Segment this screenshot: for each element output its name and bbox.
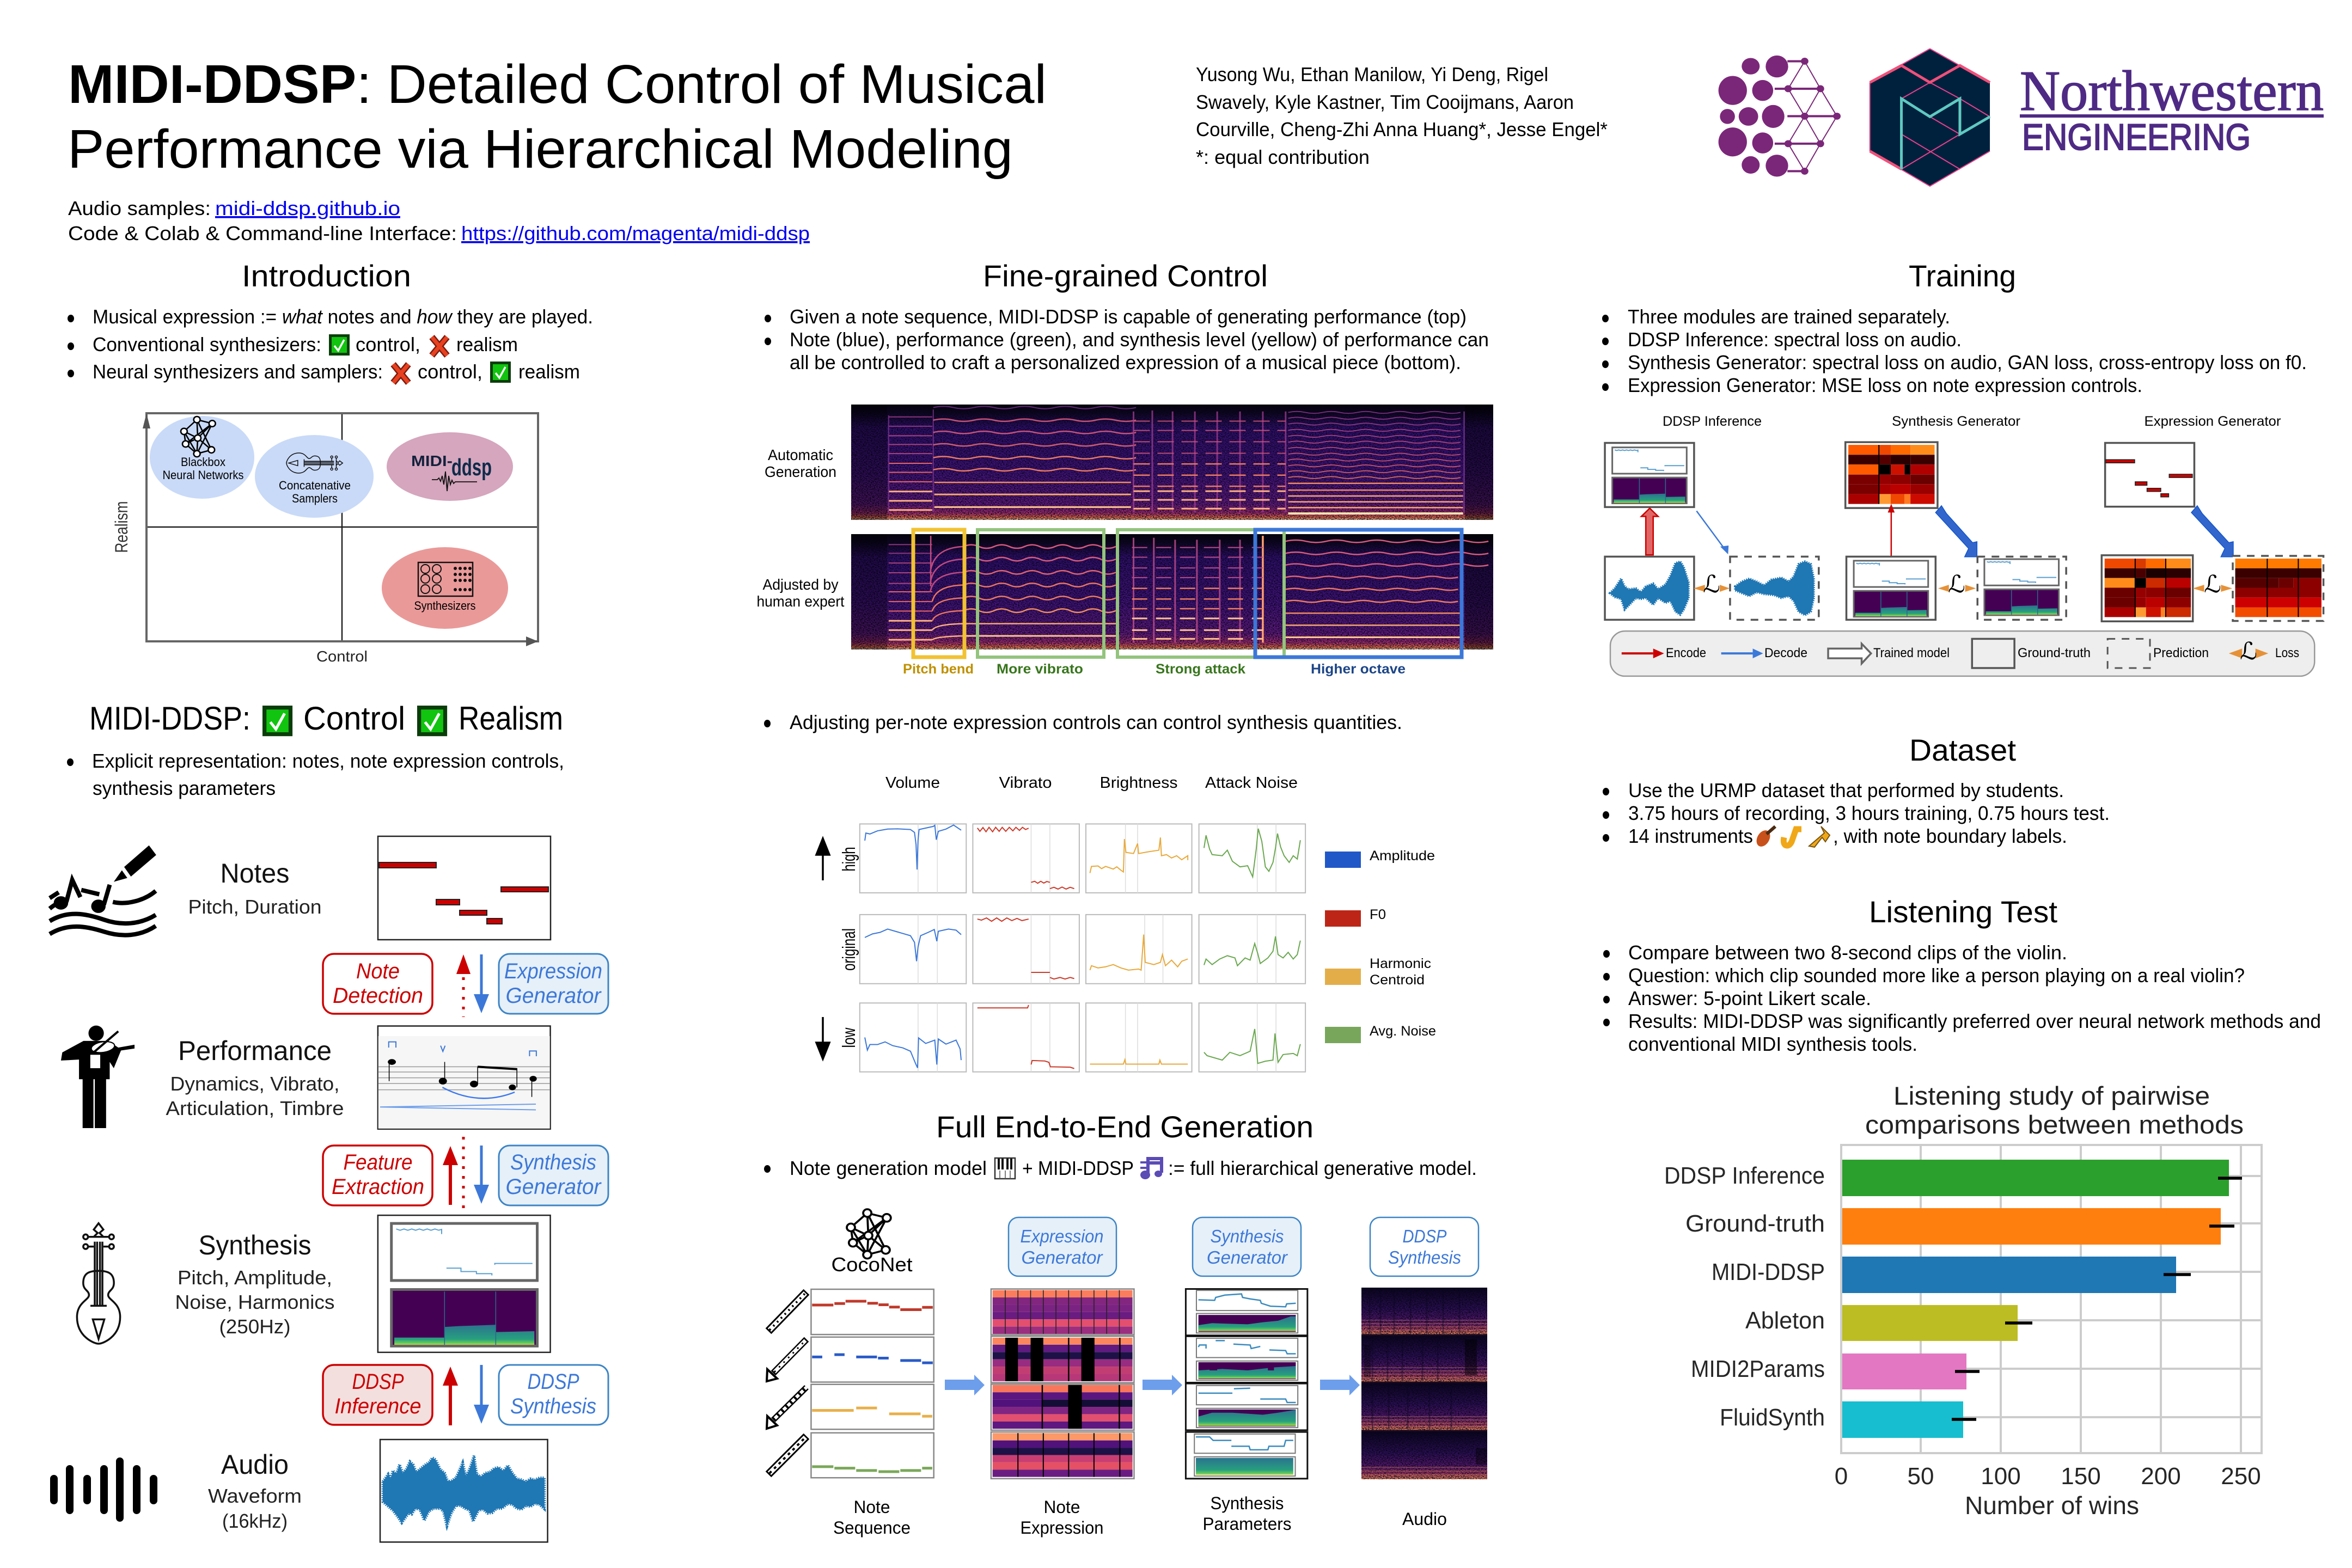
box: expression generator: Generator [505, 984, 602, 1008]
chart column labels: Brightness [1100, 774, 1177, 792]
intro bullets: control, [418, 360, 482, 383]
row labels: high [839, 847, 859, 871]
chart column labels [885, 774, 1298, 792]
x axis ticks: 100 [1981, 1463, 2021, 1490]
chart column labels: Vibrato [999, 774, 1052, 792]
label: synthesis: Synthesis [198, 1230, 311, 1260]
authors: Yusong Wu, Ethan Manilow, Yi Deng, Rigel [1196, 63, 1548, 85]
box: DDSP synthesis: Synthesis [510, 1394, 596, 1418]
title: MIDI-DDSP: Detailed Control of Musical [68, 54, 1047, 115]
row labels: low [839, 1027, 859, 1048]
training column labels: DDSP Inference [1663, 414, 1762, 429]
logo: hexagon M [1870, 49, 1990, 186]
logo: Northwestern Engineering [2020, 59, 2324, 158]
box: synthesis generator: Synthesis [1210, 1226, 1284, 1246]
x axis ticks: 0 [1835, 1463, 1848, 1490]
listening bullets: Compare between two 8-second clips of the violin. [1628, 941, 2067, 964]
column labels: Note [1043, 1497, 1080, 1517]
x axis ticks: 150 [2061, 1463, 2101, 1490]
column labels: Audio [1402, 1509, 1447, 1529]
panel: fine-grained control [757, 259, 1493, 1072]
bubble: blackbox neural networks: Blackbox [181, 455, 225, 469]
box: DDSP synthesis [1370, 1217, 1479, 1276]
box: DDSP inference [323, 1365, 432, 1425]
highlight box: higher octave [1255, 530, 1462, 657]
column labels: Parameters [1202, 1514, 1292, 1534]
box: feature extraction [323, 1146, 432, 1205]
method labels: MIDI-DDSP [1712, 1259, 1825, 1285]
links block [68, 197, 810, 244]
heading: full end-to-end generation: Full End-to-End Generation [936, 1110, 1314, 1144]
bubble: concatenative samplers: Samplers [292, 492, 338, 505]
box: expression generator [1009, 1217, 1116, 1276]
highlight labels: Strong attack [1156, 661, 1245, 677]
links block: midi-ddsp.github.io [215, 197, 400, 219]
icon: notes on staff with pen [50, 846, 156, 935]
loss symbol: synthesis generator: ℒ [1948, 571, 1965, 598]
x axis ticks: 200 [2141, 1463, 2181, 1490]
panel: listening test [1603, 895, 2321, 1520]
heading: MIDI-DDSP control realism: Control [303, 700, 405, 737]
listening bullets: conventional MIDI synthesis tools. [1628, 1033, 1917, 1055]
x axis ticks [1835, 1463, 2261, 1490]
panel: dataset [1603, 733, 2110, 849]
box: DDSP inference: DDSP [352, 1370, 404, 1394]
method labels: FluidSynth [1720, 1404, 1825, 1431]
method labels [1664, 1162, 1825, 1431]
title [68, 54, 1047, 180]
icon: trumpet emoji [1809, 826, 1830, 847]
highlight box: strong attack [1117, 530, 1284, 657]
axis label: control: Control [316, 648, 368, 665]
synthesis parameter panels [1186, 1289, 1308, 1479]
bullet: note generation model: := full hierarchical generative model. [1168, 1157, 1477, 1179]
training column labels: Expression Generator [2145, 414, 2281, 429]
label: synthesis: Noise, Harmonics [175, 1291, 334, 1313]
fine-grained bullets: all be controlled to craft a personalized expression of a musical piece (bottom). [790, 351, 1461, 373]
intro bullets: realism [456, 333, 518, 356]
training legend: Trained model [1873, 646, 1950, 660]
intro bullets: Neural synthesizers and samplers: [93, 360, 383, 383]
line series: vibrato [978, 828, 1074, 1069]
dataset bullets [1603, 779, 2110, 849]
row labels [839, 847, 859, 1048]
dataset bullets: Use the URMP dataset that performed by students. [1628, 779, 2064, 801]
highlight labels: More vibrato [997, 661, 1083, 677]
waveform [380, 1440, 548, 1542]
bars [1842, 1160, 2229, 1438]
method labels: Ableton [1745, 1307, 1825, 1334]
highlight labels: Higher octave [1311, 661, 1406, 677]
arrow: DDSP inference up [443, 1367, 458, 1425]
highlight box: pitch bend [913, 530, 964, 657]
dataset bullets: 14 instruments [1628, 825, 1753, 847]
highlight labels [903, 661, 1406, 677]
line series: attack noise [1204, 829, 1300, 1063]
heading: introduction: Introduction [242, 259, 411, 293]
box: note detection: Note [356, 959, 400, 983]
label: notes [188, 858, 321, 918]
arrow: feature extraction up [443, 1137, 463, 1214]
icon: audio bars [54, 1461, 154, 1518]
panel: full end-to-end generation [764, 1110, 1487, 1538]
training legend [1610, 631, 2314, 676]
authors [1196, 63, 1608, 168]
column labels [833, 1493, 1447, 1538]
heading: training: Training [1909, 259, 2016, 293]
heading: MIDI-DDSP control realism: Realism [459, 700, 563, 737]
diagram: expression generator training [2101, 443, 2324, 621]
chart legend: F0 [1370, 907, 1386, 922]
intro bullets [68, 305, 593, 383]
axis label: realism: Realism [112, 501, 131, 553]
icon: CocoNet network [831, 1209, 913, 1276]
box: DDSP inference: Inference [334, 1394, 421, 1418]
dataset bullets: 3.75 hours of recording, 3 hours training, 0.75 hours test. [1628, 802, 2110, 824]
arrow: note detection up [456, 954, 471, 1017]
fine-grained bullets: Given a note sequence, MIDI-DDSP is capable of generating performance (top) [790, 305, 1467, 328]
arrow: synthesis generator down [474, 1146, 489, 1204]
arrow: to expression [945, 1375, 985, 1395]
label: performance: Performance [178, 1036, 332, 1066]
chart legend: Centroid [1370, 972, 1425, 988]
label: automatic generation: Automatic [768, 446, 833, 463]
bubble: MIDI-DDSP logo: ddsp [451, 454, 492, 481]
box: DDSP synthesis [499, 1365, 608, 1425]
authors: Swavely, Kyle Kastner, Tim Cooijmans, Aaron [1196, 91, 1574, 113]
bullet: adjusting per-note: Adjusting per-note expression controls can control synthesis quantities. [790, 711, 1402, 733]
training bullets [1602, 305, 2307, 396]
training legend: Prediction [2153, 646, 2209, 660]
logo: Northwestern Engineering: Northwestern [2020, 59, 2324, 122]
bubble: concatenative samplers [255, 435, 374, 518]
chart title: comparisons between methods [1865, 1110, 2244, 1139]
icon: saxophone emoji [1783, 829, 1801, 846]
heading: dataset: Dataset [1909, 733, 2016, 767]
box: note detection: Detection [333, 984, 423, 1008]
icon: music notes [1140, 1159, 1162, 1179]
spectrogram: adjusted [851, 534, 1493, 650]
label: audio: Waveform [208, 1485, 302, 1507]
panel: introduction [68, 259, 593, 665]
audio spectrograms [1361, 1288, 1487, 1479]
box: expression generator: Expression [504, 959, 602, 983]
training bullets: DDSP Inference: spectral loss on audio. [1628, 328, 1962, 351]
chart title: Listening study of pairwise [1893, 1081, 2210, 1110]
arrow: to synthesis parameters [1143, 1375, 1182, 1395]
quadrant chart [112, 413, 538, 665]
piano roll [378, 836, 551, 940]
training bullets: Synthesis Generator: spectral loss on audio, GAN loss, cross-entropy loss on f0. [1628, 351, 2307, 373]
label: notes: Pitch, Duration [188, 896, 321, 918]
dataset bullets: , with note boundary labels. [1833, 825, 2067, 847]
diagram: synthesis generator training [1846, 442, 2066, 620]
label: adjusted by human expert [757, 576, 845, 610]
chart title [1865, 1081, 2244, 1139]
label: audio [208, 1449, 302, 1532]
fine-grained bullets: Note (blue), performance (green), and synthesis level (yellow) of performance can [790, 328, 1489, 351]
label: synthesis: Pitch, Amplitude, [178, 1266, 332, 1289]
training legend: ℒ [2240, 638, 2257, 665]
row labels: original [839, 928, 859, 971]
bullet: explicit representation: Explicit representation: notes, note expression controls, [92, 750, 564, 772]
box: expression generator: Generator [1022, 1247, 1104, 1267]
chart legend [1325, 848, 1436, 1043]
box: synthesis generator [1193, 1217, 1301, 1276]
box: synthesis generator [499, 1146, 608, 1205]
arrow: low [816, 1017, 829, 1059]
panel: MIDI-DDSP hierarchy [50, 700, 608, 1542]
bubble: blackbox neural networks: Neural Networks [162, 468, 244, 482]
chart column labels: Volume [885, 774, 940, 792]
bubble: concatenative samplers: Concatenative [279, 479, 351, 492]
x axis label: Number of wins [1965, 1491, 2139, 1520]
title: Performance via Hierarchical Modeling [68, 119, 1013, 180]
heading: MIDI-DDSP control realism: MIDI-DDSP: [89, 700, 251, 737]
highlight labels: Pitch bend [903, 661, 974, 677]
bullet: explicit representation: synthesis parameters [93, 777, 276, 799]
box: synthesis generator: Generator [1207, 1247, 1288, 1267]
icon: piano keys [995, 1158, 1015, 1179]
icon: violin [77, 1223, 120, 1344]
score with performance marks [378, 1026, 551, 1129]
links block: https://github.com/magenta/midi-ddsp [461, 222, 810, 244]
arrow: to audio [1320, 1375, 1360, 1395]
training bullets: Expression Generator: MSE loss on note expression controls. [1628, 374, 2142, 396]
links block: Audio samples: [68, 197, 211, 219]
heading: fine-grained control: Fine-grained Control [983, 259, 1268, 293]
error bars [1952, 1178, 2242, 1419]
chart column labels: Attack Noise [1205, 774, 1298, 792]
arrow: DDSP synthesis down [474, 1365, 489, 1424]
bullet: explicit representation [67, 750, 564, 799]
intro bullets: control, [356, 333, 420, 356]
listening bullets: Results: MIDI-DDSP was significantly preferred over neural network methods and [1628, 1010, 2321, 1032]
training column labels [1663, 414, 2281, 429]
links block: Code & Colab & Command-line Interface: [68, 222, 457, 244]
synthesis parameter plots [378, 1215, 551, 1352]
arrow: high [816, 838, 829, 880]
box: feature extraction: Extraction [332, 1175, 424, 1199]
line series: brightness [1090, 837, 1188, 1064]
loss symbol: DDSP inference: ℒ [1703, 571, 1720, 598]
label: audio: (16kHz) [222, 1510, 288, 1532]
icon: violin emoji [1754, 826, 1775, 849]
label: automatic generation: Generation [765, 463, 836, 480]
bubble: MIDI-DDSP logo: MIDI- [411, 452, 453, 469]
listening bullets: Answer: 5-point Likert scale. [1628, 987, 1871, 1009]
box: DDSP synthesis: Synthesis [1388, 1247, 1461, 1267]
bubble: MIDI-DDSP logo [387, 432, 513, 501]
panel: training [1602, 259, 2324, 676]
label: synthesis [175, 1230, 334, 1338]
box: note detection [323, 954, 432, 1014]
icon: CocoNet network: CocoNet [831, 1253, 913, 1276]
heading: MIDI-DDSP control realism [89, 700, 563, 737]
x axis ticks: 50 [1908, 1463, 1934, 1490]
plot frame and grid [1841, 1144, 2262, 1453]
bubble: synthesizers: Synthesizers [414, 599, 476, 612]
column labels: Sequence [833, 1518, 911, 1538]
loss symbol: expression generator: ℒ [2204, 571, 2221, 598]
label: synthesis: (250Hz) [219, 1315, 291, 1338]
synthesis quantity line charts [860, 824, 1305, 1072]
label: automatic generation [765, 446, 836, 480]
line series: volume [865, 825, 961, 1068]
method labels: DDSP Inference [1664, 1162, 1825, 1189]
listening bullets: Question: which clip sounded more like a person playing on a real violin? [1628, 964, 2245, 987]
chart legend: Harmonic [1370, 956, 1431, 971]
column labels: Note [854, 1497, 890, 1517]
label: notes: Notes [220, 858, 290, 889]
training legend: Ground-truth [2018, 646, 2091, 660]
bubble: blackbox neural networks [150, 416, 254, 499]
box: synthesis generator: Synthesis [510, 1150, 596, 1174]
training legend: Loss [2275, 646, 2299, 660]
label: performance: Dynamics, Vibrato, [170, 1073, 340, 1095]
authors: Courville, Cheng-Zhi Anna Huang*, Jesse Engel* [1196, 118, 1608, 140]
box: synthesis generator: Generator [505, 1175, 602, 1199]
training legend: Encode [1666, 646, 1706, 660]
bullet: note generation model: Note generation model [790, 1157, 987, 1179]
box: DDSP synthesis: DDSP [527, 1370, 579, 1394]
logo: purple neural net [1719, 56, 1841, 177]
intro bullets: Conventional synthesizers: [93, 333, 321, 356]
training column labels: Synthesis Generator [1892, 414, 2020, 429]
label: audio: Audio [221, 1449, 289, 1480]
arrow: expression generator down [474, 954, 489, 1013]
heading: listening test: Listening Test [1869, 895, 2057, 929]
method labels: Ground-truth [1685, 1210, 1825, 1237]
bubble: synthesizers [382, 547, 508, 629]
icon: violinist [61, 1026, 135, 1128]
listening bullets [1603, 941, 2321, 1055]
column labels: Expression [1021, 1518, 1103, 1538]
box: DDSP synthesis: DDSP [1403, 1226, 1446, 1246]
highlight box: more vibrato [978, 530, 1104, 657]
intro bullets: realism [518, 360, 580, 383]
chart legend: Amplitude [1370, 848, 1435, 863]
method labels: MIDI2Params [1691, 1356, 1825, 1382]
note expression heatmaps [991, 1289, 1134, 1479]
intro bullets: Musical expression := what notes and how they are played. [93, 305, 593, 328]
label: performance: Articulation, Timbre [166, 1097, 344, 1119]
box: expression generator [499, 954, 608, 1014]
bullet: note generation model [764, 1157, 1477, 1179]
logo: Northwestern Engineering: ENGINEERING [2022, 117, 2251, 158]
bar chart: listening study [1664, 1081, 2262, 1520]
fine-grained bullets [765, 305, 1489, 373]
note sequence panels [811, 1289, 934, 1478]
label: performance [166, 1036, 344, 1119]
bullet: note generation model: + MIDI-DDSP [1022, 1157, 1134, 1179]
box: expression generator: Expression [1021, 1226, 1103, 1246]
authors: *: equal contribution [1196, 146, 1370, 168]
diagram: DDSP inference training [1605, 443, 1819, 620]
icons: wind instruments [767, 1292, 807, 1474]
chart legend: Avg. Noise [1370, 1024, 1436, 1039]
spectrogram: automatic [851, 405, 1493, 520]
training legend: Decode [1764, 646, 1807, 660]
label: adjusted by human expert: Adjusted by [762, 576, 839, 593]
training bullets: Three modules are trained separately. [1628, 305, 1950, 328]
column labels: Synthesis [1210, 1493, 1284, 1513]
label: adjusted by human expert: human expert [757, 593, 845, 610]
box: feature extraction: Feature [343, 1150, 413, 1174]
x axis ticks: 250 [2221, 1463, 2261, 1490]
